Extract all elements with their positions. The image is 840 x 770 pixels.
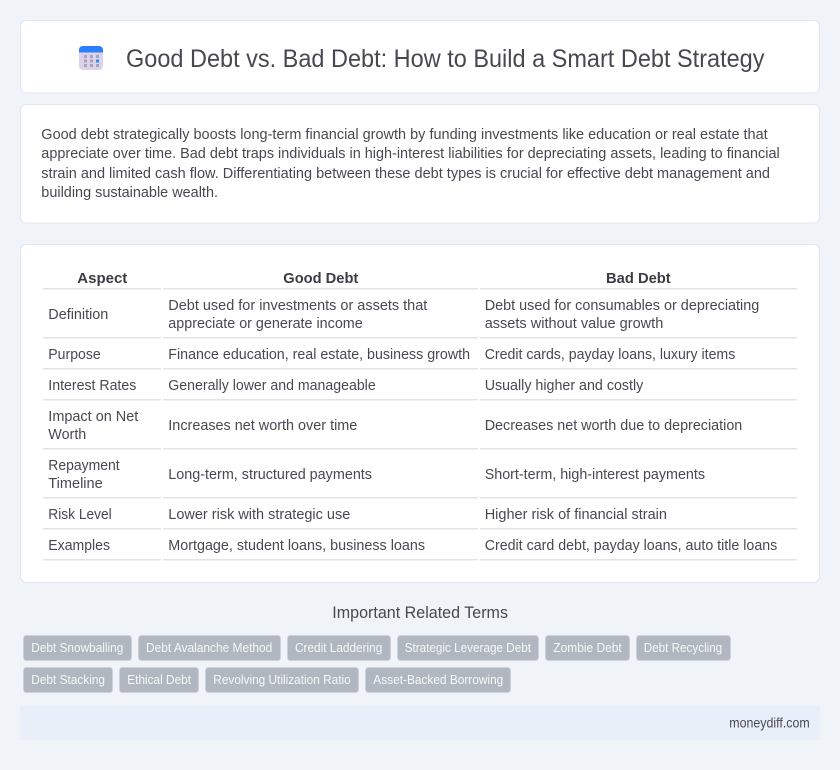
tag: strategic leverage debt <box>398 636 538 660</box>
tag: strategic leverage debt: Strategic Leverage Debt <box>405 641 531 655</box>
row: repayment timeline: Long-term, structured payments <box>168 467 372 483</box>
row: definition: Debt used for consumables or depreciating <box>485 298 759 314</box>
row: interest rates: Interest Rates <box>48 378 136 394</box>
heading: important related terms: Important Related Terms <box>332 603 508 622</box>
row: examples: Credit card debt, payday loans, auto title loans <box>485 538 777 554</box>
row: risk level <box>48 507 667 523</box>
tag: asset-backed borrowing <box>366 668 510 692</box>
tag: ethical debt <box>120 668 198 692</box>
panel: summary paragraph: strain and limited cash flow. Differentiating between these debt types is crucial for effective debt management and <box>41 166 770 182</box>
tag: credit laddering: Credit Laddering <box>295 641 382 655</box>
tag: ethical debt: Ethical Debt <box>127 673 191 687</box>
footer bar <box>20 706 820 740</box>
tag: credit laddering <box>288 636 390 660</box>
tag: debt stacking: Debt Stacking <box>31 673 105 687</box>
row: repayment timeline: Short-term, high-interest payments <box>485 467 705 483</box>
tag: debt recycling <box>636 636 730 660</box>
row: examples: Examples <box>48 538 110 554</box>
tag list <box>24 636 730 692</box>
table header row <box>77 271 671 287</box>
tag: debt snowballing: Debt Snowballing <box>31 641 123 655</box>
row: definition: appreciate or generate income <box>168 316 363 332</box>
row: interest rates: Usually higher and costly <box>485 378 644 394</box>
panel: summary paragraph: appreciate over time. Bad debt traps individuals in high-interest liabilities for depreciating assets, leading to financial <box>41 146 780 162</box>
row: examples <box>48 538 777 554</box>
row: repayment timeline: Repayment <box>48 458 120 474</box>
table header row: Good Debt <box>283 271 358 287</box>
row: definition: Definition <box>48 307 108 323</box>
row: impact on net worth <box>48 409 742 443</box>
tag: revolving utilization ratio <box>206 668 358 692</box>
row: purpose: Finance education, real estate, business growth <box>168 347 470 363</box>
table header row: Bad Debt <box>606 271 671 287</box>
row: repayment timeline: Timeline <box>48 476 103 492</box>
tag: zombie debt: Zombie Debt <box>553 641 622 655</box>
header panel <box>20 20 820 93</box>
row: examples: Mortgage, student loans, business loans <box>168 538 425 554</box>
tag: debt stacking <box>24 668 112 692</box>
tag: debt snowballing <box>24 636 132 660</box>
row: definition: Debt used for investments or assets that <box>168 298 427 314</box>
row: risk level: Higher risk of financial strain <box>485 507 667 523</box>
tag: debt avalanche method <box>138 636 280 660</box>
panel: summary paragraph: Good debt strategically boosts long-term financial growth by funding investments like education or real estate that <box>41 127 768 143</box>
panel: summary paragraph <box>20 104 820 223</box>
row: purpose: Purpose <box>48 347 101 363</box>
tag: debt avalanche method: Debt Avalanche Method <box>146 641 272 655</box>
row: purpose <box>48 347 735 363</box>
row: interest rates <box>48 378 644 394</box>
title: Good Debt vs. Bad Debt: How to Build a Smart Debt Strategy <box>126 45 765 73</box>
tag: asset-backed borrowing: Asset-Backed Borrowing <box>373 673 503 687</box>
row: impact on net worth: Worth <box>48 427 86 443</box>
row: risk level: Risk Level <box>48 507 112 523</box>
row: impact on net worth: Decreases net worth due to depreciation <box>485 418 742 434</box>
icon: calendar <box>79 46 103 70</box>
table header row: Aspect <box>77 271 127 287</box>
tag: revolving utilization ratio: Revolving Utilization Ratio <box>213 673 351 687</box>
footer bar: moneydiff.com <box>729 715 810 730</box>
row: impact on net worth: Increases net worth over time <box>168 418 357 434</box>
row: definition: assets without value growth <box>485 316 663 332</box>
row: risk level: Lower risk with strategic use <box>168 507 350 523</box>
row: repayment timeline <box>48 458 705 492</box>
panel: comparison table <box>20 244 820 582</box>
row: purpose: Credit cards, payday loans, luxury items <box>485 347 735 363</box>
tag: debt recycling: Debt Recycling <box>644 641 722 655</box>
row: interest rates: Generally lower and manageable <box>168 378 376 394</box>
panel: summary paragraph: building sustainable wealth. <box>41 185 218 201</box>
row: definition <box>48 298 759 332</box>
tag: zombie debt <box>546 636 630 660</box>
row: impact on net worth: Impact on Net <box>48 409 138 425</box>
